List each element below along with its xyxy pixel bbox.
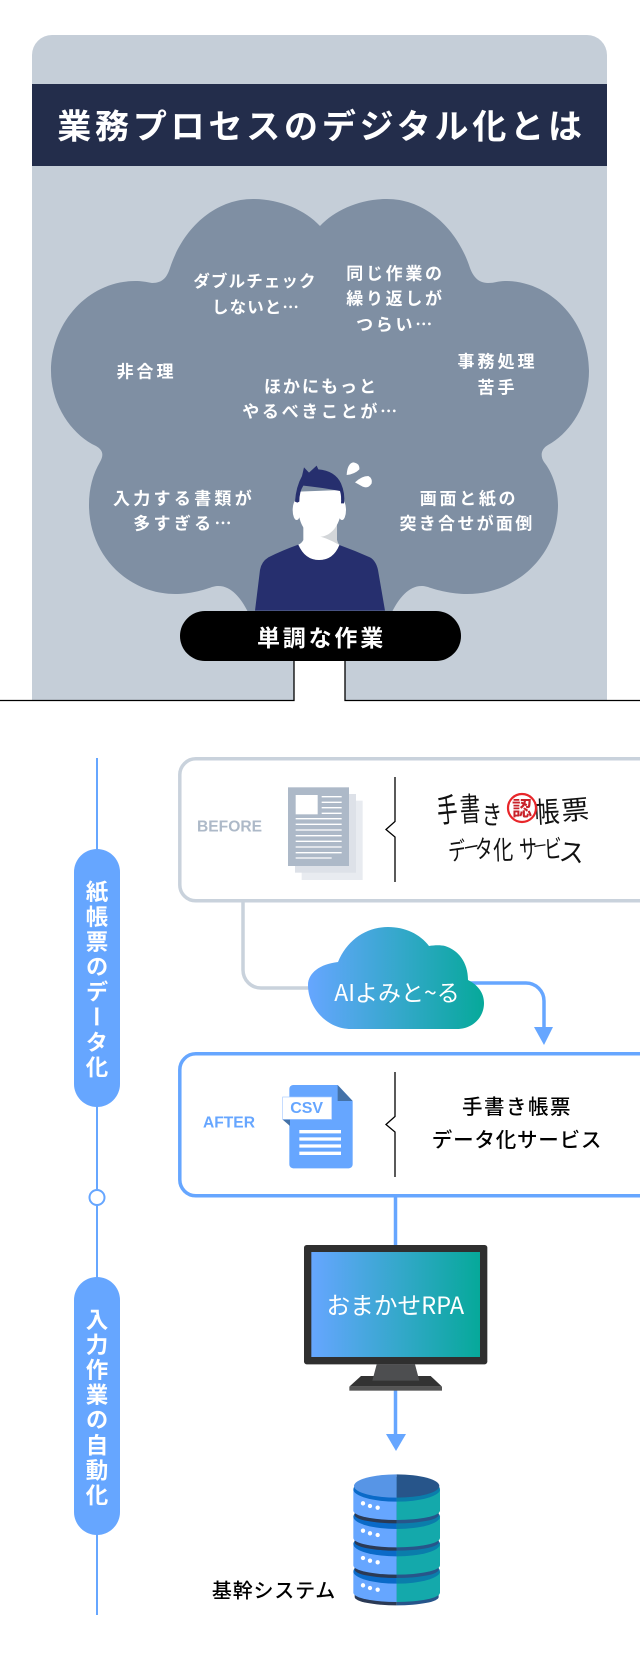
icon: paper documents — [288, 787, 363, 880]
stack layer 1 — [353, 1474, 440, 1523]
cloud: AI Yomito-ru — [308, 927, 484, 1029]
worry text: poor at paperwork — [458, 348, 538, 398]
timeline — [90, 758, 104, 1615]
icon: database — [353, 1474, 440, 1605]
worry text: screen and paper matching: 突き合せが面倒 — [399, 510, 535, 534]
pill: input automation: 入力作業の自動化 — [81, 1308, 113, 1508]
handwritten service name: 手 — [434, 784, 460, 832]
panel: before — [180, 759, 640, 901]
worry text: double check: しないと… — [212, 294, 300, 318]
red stamp: 認 — [512, 792, 532, 822]
worry text: poor at paperwork: 事務処理 — [458, 348, 538, 372]
pill: paper form digitization — [74, 849, 120, 1107]
label pill: monotonous work — [180, 611, 461, 661]
service name: 手書き帳票 — [462, 1090, 572, 1120]
worry text: too many documents — [113, 484, 255, 534]
stack layer 2 — [353, 1504, 440, 1551]
handwritten service name: ー — [461, 833, 481, 859]
pill: paper form digitization: 紙帳票のデータ化 — [81, 880, 113, 1080]
panel: background — [32, 35, 607, 700]
handwritten service name: ビ — [543, 830, 563, 866]
worry text: double check: ダブルチェック — [193, 268, 317, 292]
cloud: AI Yomito-ru: AIよみと~る — [334, 974, 460, 1008]
handwritten service name: タ — [474, 830, 494, 866]
monitor label: おまかせRPA — [326, 1287, 465, 1321]
service name: データ化サービス — [432, 1123, 602, 1153]
worry text: too many documents: 入力する書類が — [113, 484, 255, 510]
icon: monitor — [304, 1245, 487, 1391]
worry text: screen and paper matching: 画面と紙の — [420, 484, 518, 510]
worry text: repetitive work: つらい… — [356, 310, 435, 336]
handwritten service name: 化 — [492, 829, 514, 867]
icon: CSV file — [282, 1085, 353, 1168]
worry text: other things to do: ほかにもっと — [264, 372, 378, 398]
title banner — [32, 84, 607, 166]
connector: before to cloud — [243, 902, 320, 988]
label: core system: 基幹システム — [212, 1574, 336, 1604]
title banner: 業務プロセスのデジタル化とは — [57, 100, 586, 148]
worry text: repetitive work — [346, 260, 445, 336]
worry text: screen and paper matching — [399, 484, 535, 534]
arrow: monitor to database — [386, 1390, 406, 1451]
handwritten service name: ー — [532, 835, 548, 857]
brace divider — [386, 1072, 395, 1177]
label: before: BEFORE — [197, 818, 262, 836]
handwritten service name: ス — [557, 831, 587, 871]
icon: worried person — [255, 462, 385, 611]
arrow: after to monitor — [394, 1197, 397, 1245]
worry text: other things to do — [242, 372, 400, 422]
handwritten service name — [434, 783, 590, 871]
icon: CSV file: CSV — [290, 1100, 323, 1117]
label pill: monotonous work: 単調な作業 — [257, 619, 386, 653]
arrow: cloud to after — [470, 983, 553, 1045]
thought cloud — [51, 199, 589, 612]
service name — [432, 1090, 602, 1153]
label: after: AFTER — [203, 1114, 255, 1132]
panel: after — [180, 1054, 640, 1196]
worry text: double check — [193, 268, 317, 318]
worry text: poor at paperwork: 苦手 — [478, 374, 518, 398]
worry text: irrational: 非合理 — [117, 358, 176, 382]
section boundary — [0, 661, 640, 700]
handwritten service name: 書 — [459, 783, 481, 831]
worry text: repetitive work: 繰り返しが — [346, 284, 445, 310]
handwritten service name: 票 — [560, 788, 590, 828]
handwritten service name: 帳 — [533, 789, 561, 831]
worry text: other things to do: やるべきことが… — [242, 398, 400, 422]
stack layer 4 — [353, 1559, 440, 1605]
handwritten service name: デ — [446, 831, 468, 869]
handwritten service name: サ — [518, 829, 538, 867]
worry text: repetitive work: 同じ作業の — [346, 260, 445, 284]
handwritten service name: き — [481, 793, 503, 833]
pill: input automation — [74, 1277, 120, 1535]
brace divider — [386, 777, 395, 882]
worry text: too many documents: 多すぎる… — [133, 510, 235, 534]
stack layer 3 — [353, 1532, 440, 1578]
